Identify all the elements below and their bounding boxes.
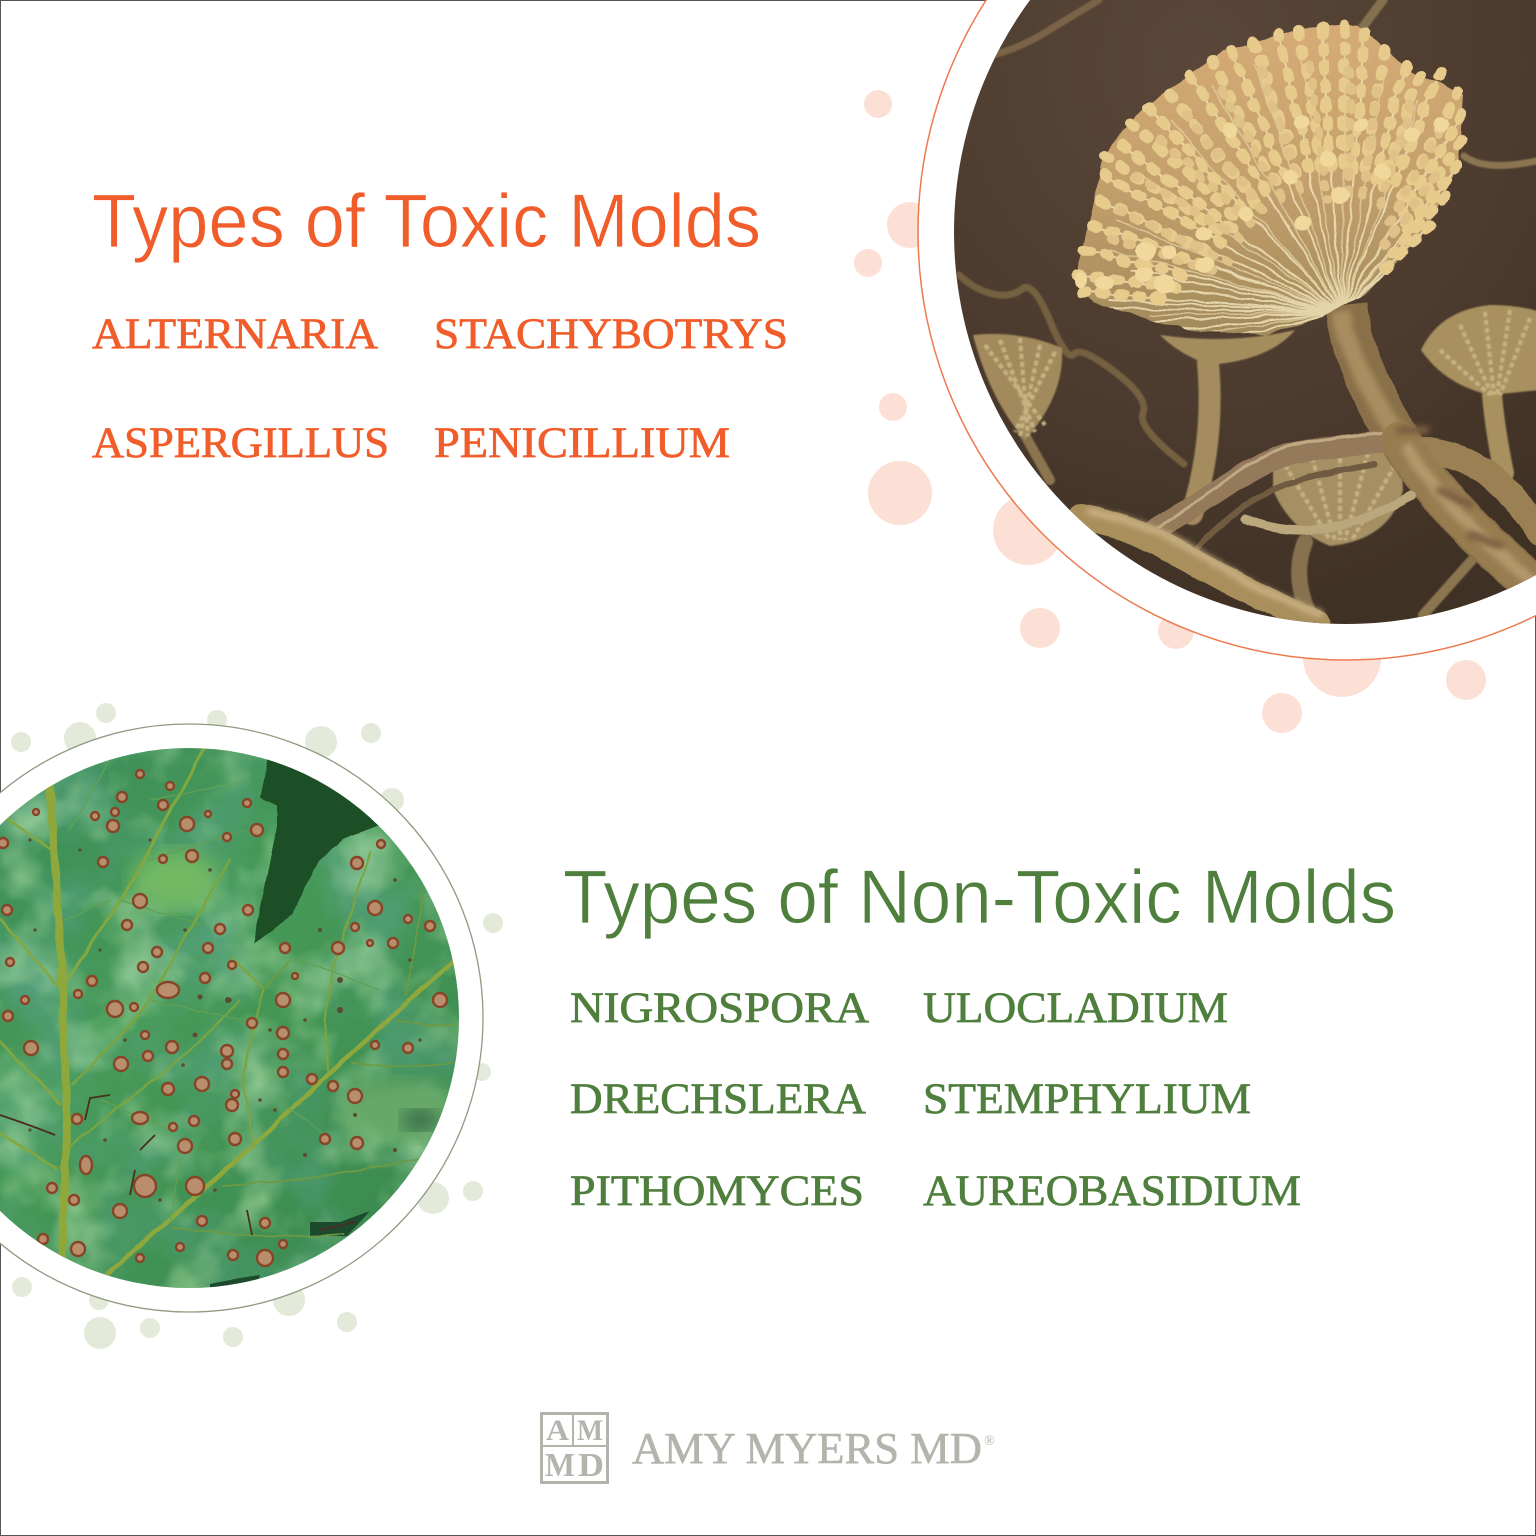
list: toxic mold names — [92, 311, 788, 467]
photo: aspergillus mold under microscope — [950, 0, 1536, 630]
section: types of non-toxic molds — [563, 855, 1396, 1215]
list: toxic mold names: PENICILLIUM — [434, 420, 730, 467]
list: toxic mold names: ASPERGILLUS — [92, 420, 389, 467]
logo mark: M — [545, 1447, 575, 1484]
main mold head — [1073, 24, 1464, 335]
list: non-toxic mold names: ULOCLADIUM — [923, 985, 1228, 1032]
registered mark: ® — [984, 1434, 995, 1449]
list: non-toxic mold names: DRECHSLERA — [570, 1076, 866, 1123]
tiny dark specks — [28, 838, 422, 1202]
ring: toxic mold photo frame — [918, 0, 1536, 660]
list: non-toxic mold names: AUREOBASIDIUM — [923, 1168, 1301, 1215]
small background mold heads — [973, 305, 1536, 546]
photo: leaf with mold spots — [0, 745, 465, 1290]
list: non-toxic mold names — [570, 985, 1301, 1215]
heading: types of non-toxic molds: Types of Non-Toxic Molds — [563, 855, 1396, 940]
bright spore tips — [1073, 115, 1448, 293]
logo wordmark: AMY MYERS MD — [632, 1424, 982, 1473]
logo mark — [541, 1413, 608, 1484]
main stalk — [1340, 305, 1536, 595]
list: toxic mold names: ALTERNARIA — [92, 311, 378, 358]
logo mark: M — [577, 1414, 603, 1447]
logo: Amy Myers MD — [541, 1413, 995, 1484]
decorative spores: non-toxic molds — [11, 703, 503, 1349]
veins — [0, 750, 457, 1274]
ring: non-toxic mold photo frame — [0, 724, 483, 1312]
intertwined hyphae — [1082, 430, 1536, 624]
list: non-toxic mold names: STEMPHYLIUM — [923, 1076, 1251, 1123]
mold spots — [0, 770, 447, 1266]
dark background gap — [254, 760, 379, 944]
decorative spores: toxic molds — [854, 90, 1486, 733]
cracks — [0, 1095, 355, 1235]
list: non-toxic mold names: PITHOMYCES — [570, 1168, 864, 1215]
spore chains — [1076, 26, 1462, 298]
list: non-toxic mold names: NIGROSPORA — [570, 985, 869, 1032]
dark holes — [310, 1211, 370, 1236]
heading: types of toxic molds: Types of Toxic Molds — [92, 179, 761, 264]
logo mark: D — [578, 1447, 604, 1484]
leaf colour variation — [0, 745, 465, 1290]
section: types of toxic molds — [92, 179, 788, 467]
list: toxic mold names: STACHYBOTRYS — [434, 311, 788, 358]
logo mark: A — [546, 1414, 569, 1447]
